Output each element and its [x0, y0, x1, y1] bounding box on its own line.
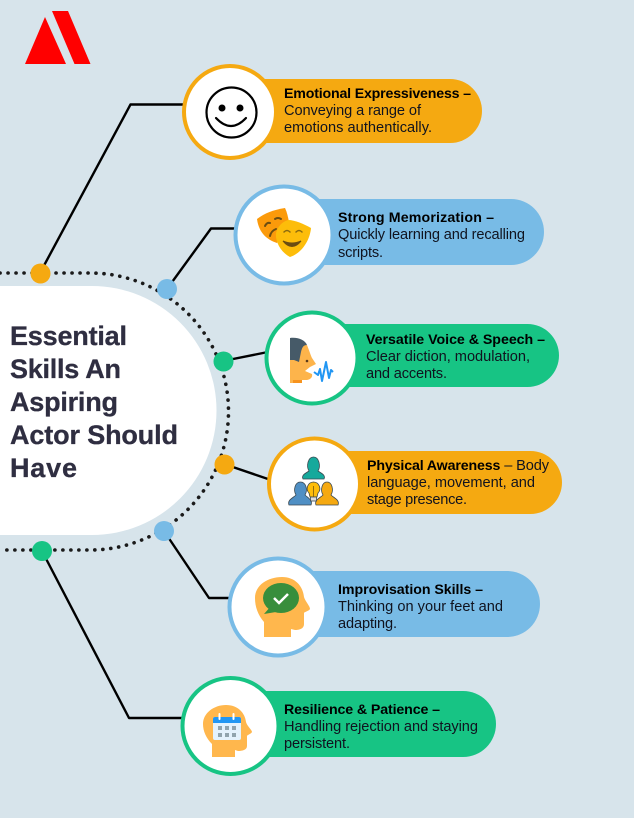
icon circle: [230, 558, 326, 656]
pill: [330, 451, 562, 514]
dotted arc: [0, 273, 228, 550]
text: emotions authentically.: [284, 120, 432, 136]
text: [284, 86, 471, 136]
panel: improvisation skills: [230, 558, 540, 656]
logo: [25, 11, 90, 64]
text: [284, 702, 478, 752]
icon circle: [182, 678, 278, 774]
text: Emotional Expressiveness –: [284, 86, 471, 102]
pill: [250, 691, 496, 757]
panel: physical awareness: [269, 438, 562, 530]
text: [338, 210, 525, 261]
text: [366, 332, 545, 382]
text: Clear diction, modulation,: [366, 349, 530, 365]
text: Thinking on your feet and: [338, 599, 503, 615]
text: stage presence.: [367, 492, 467, 508]
panel: versatile voice and speech: [266, 312, 559, 404]
icon circle: [184, 66, 276, 158]
text: Quickly learning and recalling: [338, 227, 525, 243]
panel: resilience and patience: [182, 678, 496, 774]
panel: emotional expressiveness: [184, 66, 482, 158]
text: adapting.: [338, 616, 397, 632]
text: Handling rejection and staying: [284, 719, 478, 735]
text: language, movement, and: [367, 475, 535, 491]
panel: strong memorization: [236, 186, 544, 284]
title: Actor Should: [10, 420, 178, 450]
text: [338, 582, 503, 632]
central title panel: [0, 286, 216, 535]
icon: head with calendar: [203, 705, 252, 757]
text: [367, 458, 550, 508]
text: and accents.: [366, 366, 447, 382]
pill: [300, 571, 540, 637]
node dots: [30, 264, 234, 561]
title: [10, 321, 178, 483]
text: Strong Memorization –: [338, 210, 494, 226]
icon: group with light bulb: [289, 457, 338, 505]
pill: [330, 324, 559, 387]
title: Have: [10, 453, 77, 483]
text: Improvisation Skills –: [338, 582, 483, 598]
title: Essential: [10, 321, 127, 351]
text: scripts.: [338, 245, 383, 261]
icon: smiley face: [206, 88, 256, 138]
text: persistent.: [284, 736, 350, 752]
text: Physical Awareness – Body: [367, 458, 550, 474]
title: Aspiring: [10, 387, 118, 417]
icon: theatre masks: [257, 208, 311, 257]
icon: head with speech bubble: [255, 577, 310, 637]
icon: speaking head: [290, 338, 333, 383]
text: Versatile Voice & Speech –: [366, 332, 545, 348]
text: Conveying a range of: [284, 103, 422, 119]
icon circle: [236, 186, 332, 284]
title: Skills An: [10, 354, 121, 384]
connector lines: [40, 104, 268, 718]
icon circle: [266, 312, 358, 404]
text: Resilience & Patience –: [284, 702, 440, 718]
icon circle: [269, 438, 360, 530]
pill: [250, 79, 482, 143]
pill: [300, 199, 544, 265]
